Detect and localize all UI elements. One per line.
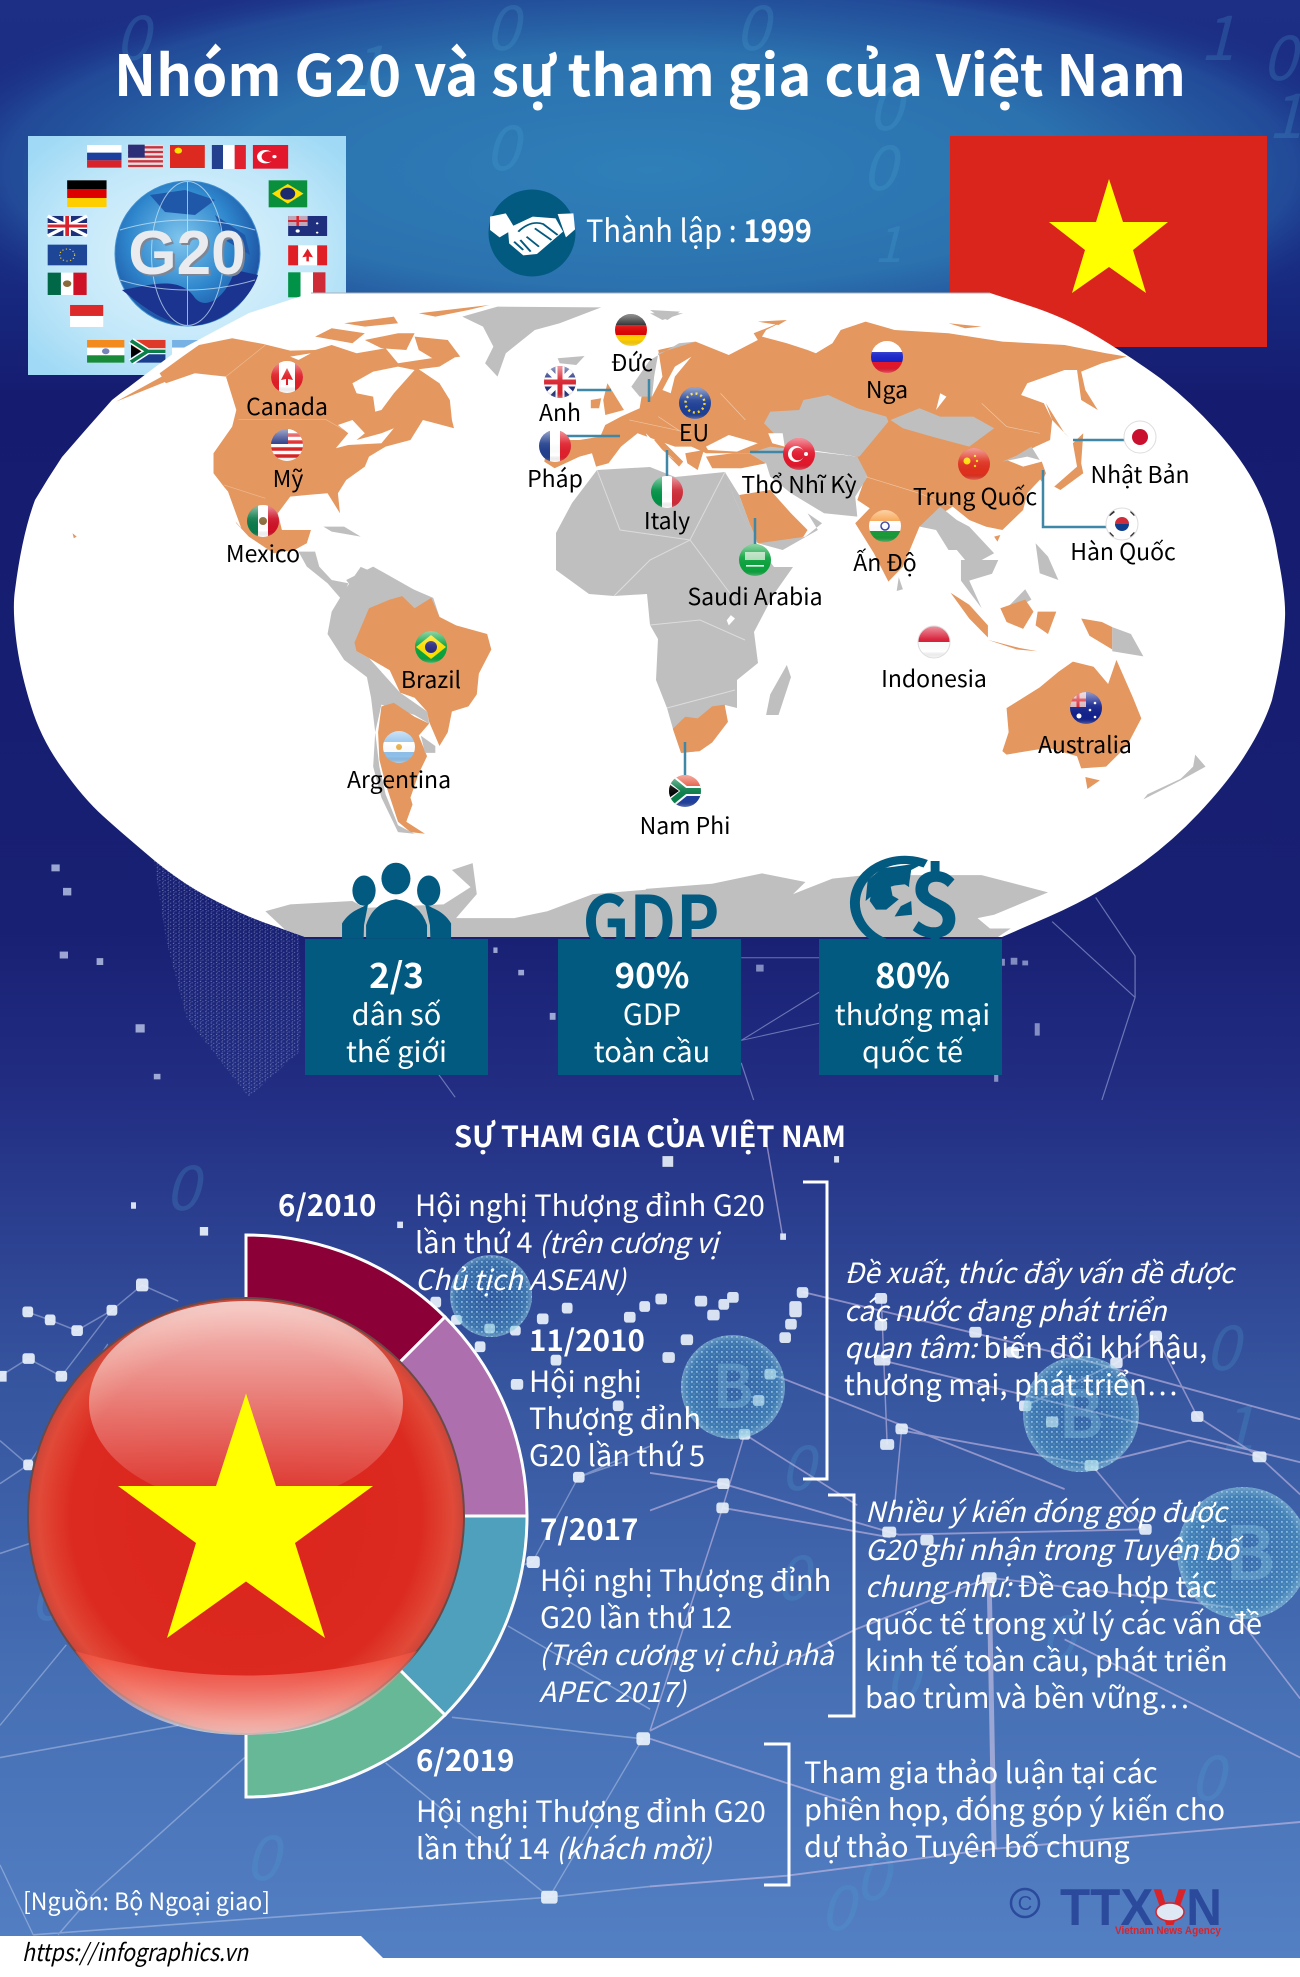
stat: population: 2/3 xyxy=(369,948,424,999)
title: Nhóm G20 và sự tham gia của Việt Nam xyxy=(114,31,1186,113)
note A: quan tâm: biến đổi khí hậu, xyxy=(844,1325,1207,1367)
background: 0 xyxy=(885,1628,926,1718)
stat: population: dân số xyxy=(352,992,441,1034)
note C: dự thảo Tuyên bố chung xyxy=(804,1824,1130,1866)
panel: world map xyxy=(14,293,1285,942)
country: EU xyxy=(679,387,711,442)
icon: G20 globe: G20 xyxy=(130,221,248,290)
event: 7/2017: (Trên cương vị chủ nhà xyxy=(539,1634,835,1674)
country: Italy: Italy xyxy=(644,502,690,536)
country: Russia: Nga xyxy=(866,371,908,405)
event: 11/2010: Thượng đỉnh xyxy=(529,1396,701,1438)
country: Turkey xyxy=(741,438,857,500)
note B: bao trùm và bền vững… xyxy=(865,1675,1189,1717)
event: 7/2017: Hội nghị Thượng đỉnh xyxy=(540,1558,831,1600)
event: 6/2010: Chủ tịch ASEAN) xyxy=(415,1259,627,1299)
note A: thương mại, phát triển… xyxy=(844,1362,1178,1404)
country: Turkey: Thổ Nhĩ Kỳ xyxy=(741,466,857,500)
event: 7/2017: APEC 2017) xyxy=(539,1671,688,1711)
note A xyxy=(844,1252,1236,1404)
background: 0 xyxy=(820,1858,861,1948)
icon: globe and dollar xyxy=(850,856,956,939)
country: Argentina: Argentina xyxy=(347,761,451,795)
country: Japan: Nhật Bản xyxy=(1090,456,1190,490)
event: 6/2019: lần thứ 14 (khách mời) xyxy=(416,1826,713,1868)
bitcoin globes xyxy=(450,1255,1300,1619)
country: Saudi Arabia xyxy=(688,544,821,606)
background: 0 xyxy=(1205,1298,1246,1388)
timeline ring xyxy=(246,1235,527,1797)
stat: GDP xyxy=(558,939,741,1075)
stat: GDP: toàn cầu xyxy=(594,1029,710,1071)
background: 0 xyxy=(30,1548,71,1638)
background: 0 xyxy=(780,1418,821,1508)
note A: các nước đang phát triển xyxy=(844,1290,1168,1330)
background: 0 xyxy=(165,1138,206,1228)
panel: G20 flags and globe xyxy=(28,136,346,375)
grey land upper frame xyxy=(299,307,680,600)
country: South Africa: Nam Phi xyxy=(640,807,730,841)
background: 0 xyxy=(775,1528,816,1618)
founded text: Thành lập : 1999 xyxy=(586,206,812,251)
country: Japan xyxy=(1090,421,1190,490)
event: 11/2010: 11/2010 xyxy=(529,1318,645,1360)
icon: G20 globe xyxy=(115,181,260,326)
background: 1 xyxy=(1220,1378,1254,1468)
country: Argentina xyxy=(347,731,451,795)
continents xyxy=(73,305,1206,942)
bitcoin globes: B xyxy=(1059,1362,1103,1458)
Vietnam flag xyxy=(950,136,1267,347)
country: Canada: Canada xyxy=(246,388,328,422)
country: China: Trung Quốc xyxy=(913,478,1037,512)
event: 6/2010: 6/2010 xyxy=(278,1183,376,1225)
background: 0 xyxy=(1040,1588,1081,1678)
country: India xyxy=(853,510,917,578)
bracket B xyxy=(828,1495,854,1716)
icon: globe and dollar: $ xyxy=(908,833,962,963)
event: 6/2010: Hội nghị Thượng đỉnh G20 xyxy=(415,1183,765,1225)
stat: trade: 80% xyxy=(875,948,950,999)
country: Germany xyxy=(612,314,652,372)
event: 7/2017 xyxy=(539,1507,835,1711)
country: Indonesia xyxy=(883,626,985,688)
stat: trade xyxy=(819,939,1002,1075)
country: EU: EU xyxy=(679,414,709,448)
note C: Tham gia thảo luận tại các xyxy=(804,1750,1158,1792)
country: UK: Anh xyxy=(539,394,581,428)
background: 0 xyxy=(1262,8,1300,98)
heading: Vietnam participation: SỰ THAM GIA CỦA VIỆT NAM xyxy=(454,1114,846,1156)
country: Saudi Arabia: Saudi Arabia xyxy=(687,578,823,612)
note B: kinh tế toàn cầu, phát triển xyxy=(865,1638,1228,1680)
country: Australia xyxy=(1038,692,1130,754)
event: 11/2010: Hội nghị xyxy=(529,1359,642,1401)
stat: population: thế giới xyxy=(346,1029,447,1071)
logo: TTXVN: C xyxy=(1018,1893,1032,1915)
event: 6/2010 xyxy=(278,1183,765,1299)
country: UK xyxy=(539,366,580,421)
background: 0 xyxy=(868,58,909,148)
country: China xyxy=(913,448,1037,512)
Lower frame left: South America & Antarctica xyxy=(265,567,655,942)
stat: GDP: 90% xyxy=(614,948,690,999)
Africa xyxy=(556,467,793,753)
country: USA: Mỹ xyxy=(273,460,303,494)
note B: G20 ghi nhận trong Tuyên bố xyxy=(865,1529,1244,1569)
event: 6/2019: 6/2019 xyxy=(416,1738,514,1780)
country: Korea: Hàn Quốc xyxy=(1070,533,1176,567)
country: Germany: Đức xyxy=(611,344,653,378)
background: 0 xyxy=(1190,1728,1231,1818)
stat: trade: thương mại xyxy=(835,992,990,1034)
Lower frame right: Africa details, Asia Pacific xyxy=(646,560,1206,942)
logo: TTXVN: TTXVN xyxy=(1060,1879,1222,1937)
background: 0 xyxy=(485,98,526,188)
dotted map texture xyxy=(153,856,303,1097)
event: 6/2010: lần thứ 4 (trên cương vị xyxy=(415,1220,721,1262)
note A: Đề xuất, thúc đẩy vấn đề được xyxy=(844,1252,1236,1292)
network lines lower right xyxy=(650,1140,1300,1886)
bracket A xyxy=(803,1182,827,1479)
background: 1 xyxy=(874,205,902,277)
icon: handshake xyxy=(488,190,576,276)
event: 11/2010 xyxy=(529,1318,705,1475)
note C xyxy=(804,1750,1225,1866)
Orange: North America xyxy=(73,305,624,553)
background: 0 xyxy=(855,1828,896,1918)
stat: trade: quốc tế xyxy=(862,1029,964,1071)
background: 0 xyxy=(862,118,903,208)
country: South Africa xyxy=(642,775,729,834)
bitcoin globes: B xyxy=(713,1339,753,1426)
icon: people xyxy=(342,863,451,939)
country: Korea xyxy=(1070,508,1176,567)
network lines lower left xyxy=(0,1202,650,1935)
map connector lines xyxy=(566,379,1129,776)
note B xyxy=(865,1491,1262,1717)
country: Italy xyxy=(644,476,690,536)
Vietnam flag sphere xyxy=(28,1298,464,1735)
stat: population xyxy=(305,939,488,1075)
country: USA xyxy=(271,429,303,494)
note B: quốc tế trong xử lý các vấn đề xyxy=(865,1601,1262,1643)
country: Brazil: Brazil xyxy=(401,661,461,695)
country: France: Pháp xyxy=(527,460,583,494)
flags row xyxy=(48,145,327,363)
background: 0 xyxy=(245,1808,286,1898)
event: 6/2019 xyxy=(416,1738,766,1868)
event: 11/2010: G20 lần thứ 5 xyxy=(529,1433,705,1475)
country: Australia: Australia xyxy=(1038,726,1132,760)
note C: phiên họp, đóng góp ý kiến cho xyxy=(804,1787,1225,1829)
footer strip: https://infographics.vn xyxy=(22,1933,249,1968)
country: Russia xyxy=(868,341,906,404)
event: 7/2017: 7/2017 xyxy=(540,1507,638,1549)
icon: G20 globe: G20 xyxy=(128,219,246,288)
background: 1 xyxy=(350,18,384,108)
country: Mexico xyxy=(228,505,299,562)
logo: TTXVN: Vietnam News Agency xyxy=(1115,1925,1222,1937)
Eurasia xyxy=(544,313,1127,582)
note B: Nhiều ý kiến đóng góp được xyxy=(865,1491,1229,1531)
bracket C xyxy=(764,1744,789,1885)
country: France xyxy=(527,430,583,494)
country: Canada xyxy=(247,361,326,416)
note B: chung như: Đề cao hợp tác xyxy=(865,1564,1217,1606)
bitcoin globes: B xyxy=(1225,1495,1275,1602)
country: India: Ấn Độ xyxy=(853,544,917,578)
event: 6/2019: Hội nghị Thượng đỉnh G20 xyxy=(416,1789,766,1831)
source: [Nguồn: Bộ Ngoại giao] xyxy=(23,1882,270,1917)
country: Mexico: Mexico xyxy=(226,535,300,569)
country: Brazil xyxy=(403,631,460,688)
country: Indonesia: Indonesia xyxy=(881,660,987,694)
icon: GDP: GDP xyxy=(582,864,720,969)
event: 7/2017: G20 lần thứ 12 xyxy=(540,1595,732,1637)
footer strip xyxy=(0,1933,1300,1977)
stat: GDP: GDP xyxy=(623,992,681,1034)
